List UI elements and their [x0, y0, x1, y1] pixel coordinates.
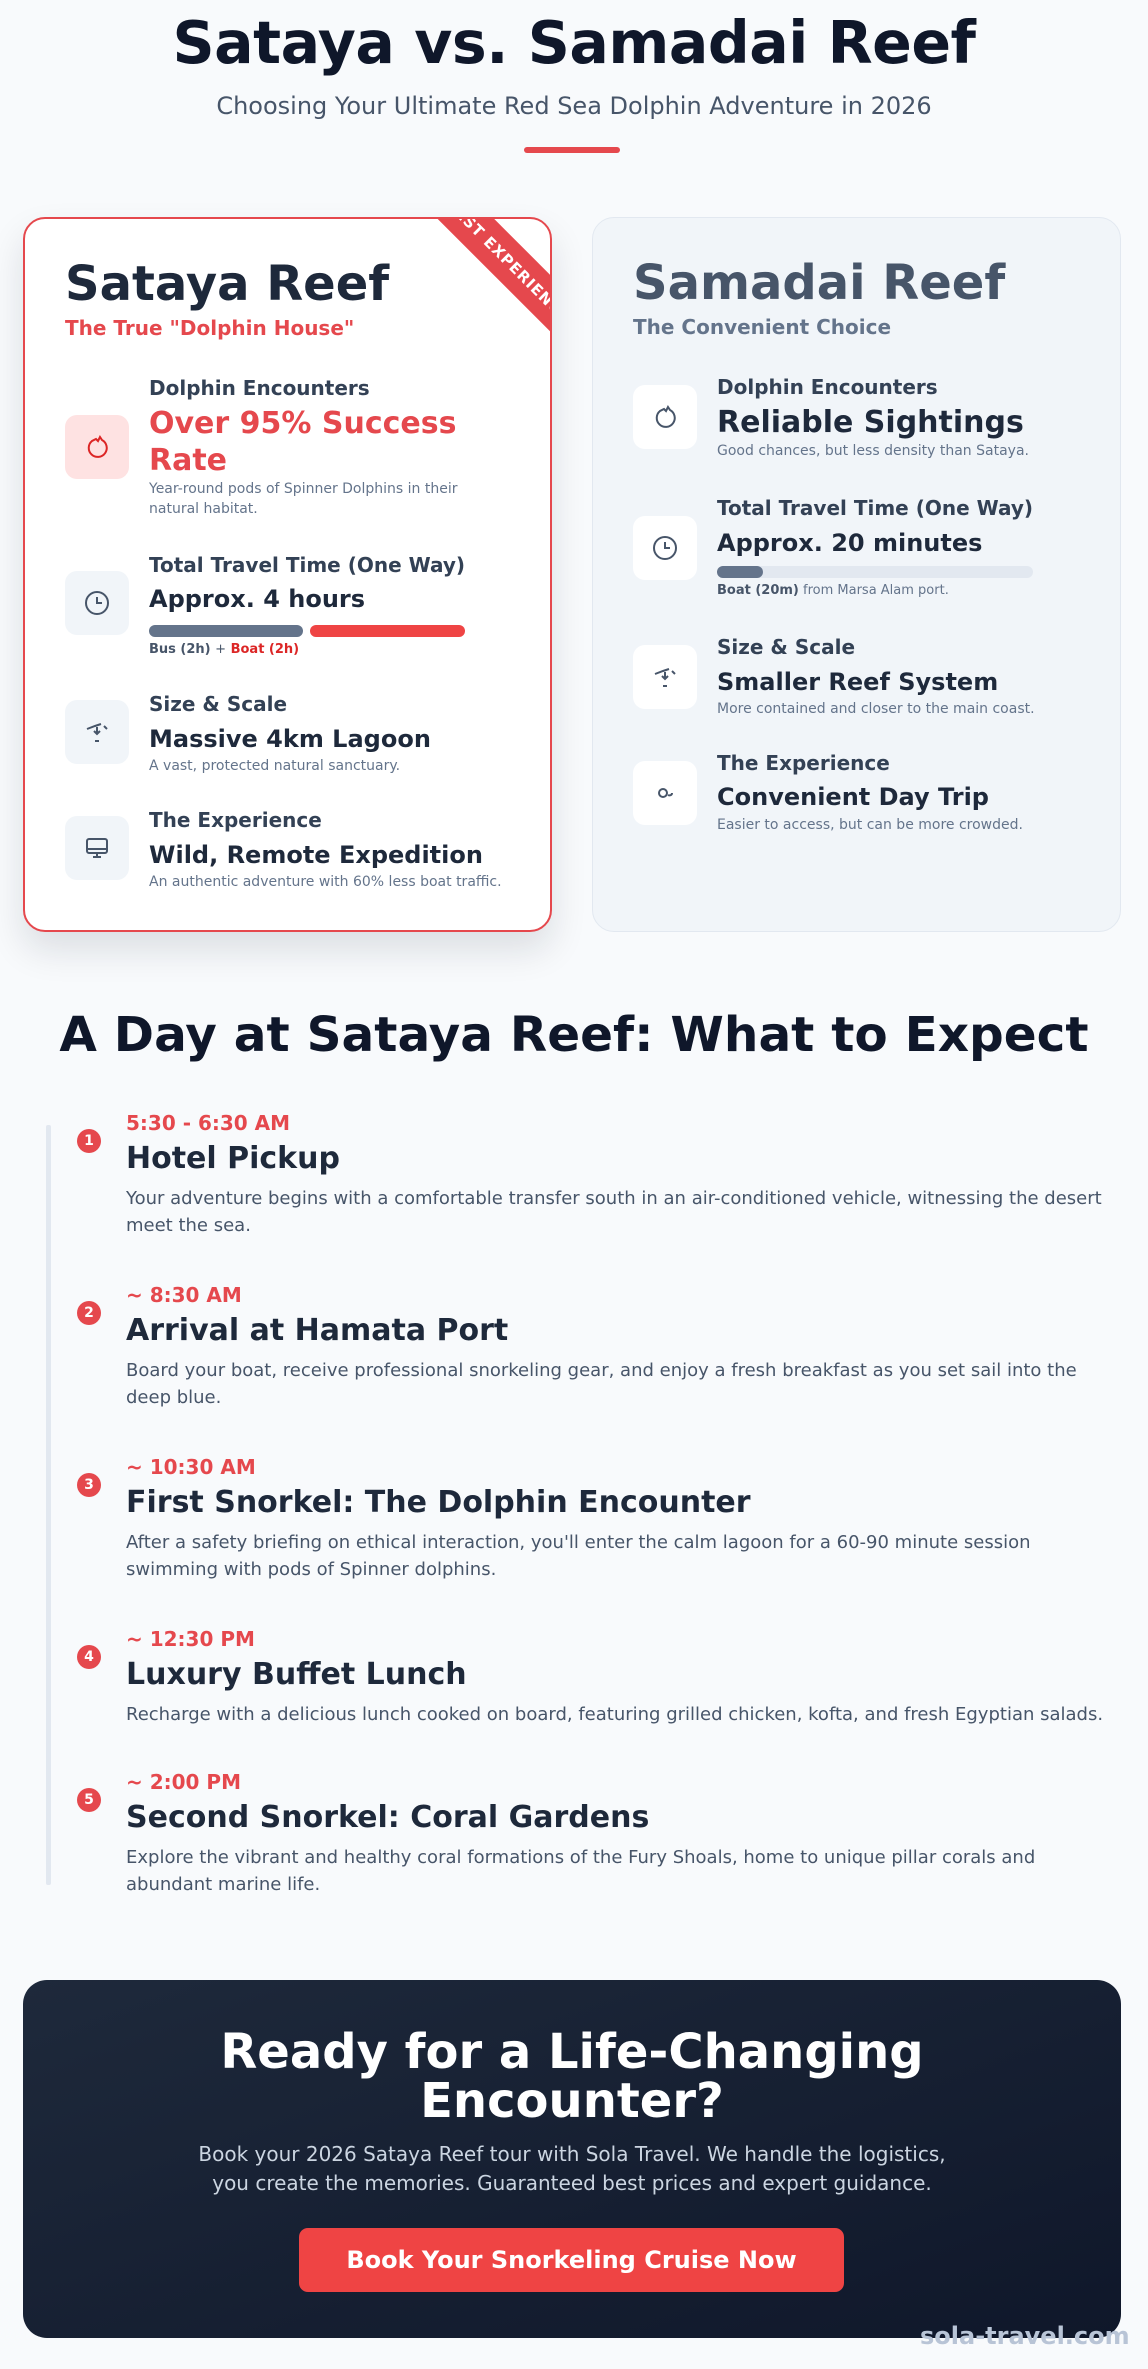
- text: size: Size & Scale: [717, 635, 855, 659]
- icon: clock: [633, 516, 697, 580]
- step 5: Explore the vibrant and healthy coral formations of the Fury Shoals, home to unique pillar corals and abundant marine life.: [126, 1847, 1035, 1895]
- step 2: 2: [84, 1305, 94, 1321]
- timeline: [46, 1125, 51, 1885]
- step 1: 1: [84, 1133, 94, 1149]
- CTA panel: [23, 1980, 1121, 2338]
- CTA text: you create the memories. Guaranteed best prices and expert guidance.: [212, 2171, 932, 2195]
- panel: Sataya Reef: An authentic adventure with 60% less boat traffic.: [149, 874, 502, 890]
- panel: Samadai Reef: More contained and closer to the main coast.: [717, 701, 1035, 717]
- section heading: A Day at Sataya Reef: What to Expect: [59, 1007, 1089, 1063]
- subheading: The True "Dolphin House": [65, 316, 354, 340]
- panel: Sataya Reef: Approx. 4 hours: [149, 585, 365, 613]
- step 5: [77, 1770, 1035, 1895]
- step 4: Recharge with a delicious lunch cooked on board, featuring grilled chicken, kofta, and fresh Egyptian salads.: [126, 1704, 1103, 1725]
- panel: Sataya Reef: A vast, protected natural sanctuary.: [149, 758, 400, 774]
- icon: clock: [65, 571, 129, 635]
- CTA button: Book Your Snorkeling Cruise Now: [346, 2246, 797, 2274]
- step 2: Arrival at Hamata Port: [126, 1313, 508, 1348]
- step 5: 5: [84, 1792, 94, 1808]
- panel: Sataya Reef: Over 95% Success Rate: [149, 406, 456, 478]
- step 4: [77, 1627, 1103, 1725]
- watermark: sola-travel.com: [920, 2322, 1130, 2350]
- panel: Samadai Reef: Boat (20m) from Marsa Alam port.: [717, 583, 949, 598]
- step 1: Hotel Pickup: [126, 1141, 340, 1176]
- timeline line: [46, 1125, 51, 1885]
- panel: Samadai Reef: Convenient Day Trip: [717, 783, 989, 811]
- heading: Sataya Reef: [65, 256, 389, 312]
- CTA text: Book your 2026 Sataya Reef tour with Sola Travel. We handle the logistics,: [198, 2142, 946, 2166]
- step 5: ~ 2:00 PM: [126, 1770, 241, 1794]
- text: experience: The Experience: [717, 751, 890, 775]
- accent bar: [524, 147, 620, 153]
- bar: bus + boat: [149, 625, 303, 637]
- title: Sataya vs. Samadai Reef: [173, 9, 975, 77]
- step 3: After a safety briefing on ethical interaction, you'll enter the calm lagoon for a 60-90 minute session swimming with pods of Spinner dolphins.: [126, 1532, 1030, 1580]
- CTA heading: Encounter?: [420, 2073, 724, 2129]
- panel: Sataya Reef: Massive 4km Lagoon: [149, 725, 431, 753]
- heading: Samadai Reef: [633, 255, 1005, 311]
- panel: Sataya Reef: [23, 217, 552, 932]
- panel: Sataya Reef: Year-round pods of Spinner Dolphins in their natural habitat.: [149, 481, 458, 517]
- CTA heading: [220, 2024, 924, 2129]
- text: dolphin encounters: Dolphin Encounters: [149, 376, 370, 400]
- text: size: Size & Scale: [149, 692, 287, 716]
- step 4: 4: [84, 1649, 94, 1665]
- panel: Samadai Reef: Reliable Sightings: [717, 405, 1024, 440]
- icon: dolphin: [65, 415, 129, 479]
- step 2: Board your boat, receive professional snorkeling gear, and enjoy a fresh breakfast as you set sail into the deep blue.: [126, 1360, 1077, 1408]
- panel: Samadai Reef: Easier to access, but can be more crowded.: [717, 817, 1023, 833]
- step 2: [77, 1283, 1077, 1408]
- icon: scale: [65, 700, 129, 764]
- icon: day trip: [633, 761, 697, 825]
- CTA heading: Ready for a Life-Changing: [220, 2024, 924, 2080]
- icon: expedition: [65, 816, 129, 880]
- step 4: ~ 12:30 PM: [126, 1627, 255, 1651]
- step 2: ~ 8:30 AM: [126, 1283, 242, 1307]
- CTA button: [299, 2228, 844, 2292]
- step 4: Luxury Buffet Lunch: [126, 1657, 467, 1692]
- step 3: First Snorkel: The Dolphin Encounter: [126, 1485, 751, 1520]
- panel: Samadai Reef: Good chances, but less density than Sataya.: [717, 443, 1029, 459]
- icon: dolphin: [633, 385, 697, 449]
- text: travel time: Total Travel Time (One Way): [717, 496, 1033, 520]
- ribbon: best experience: [398, 151, 618, 371]
- step 3: [77, 1455, 1030, 1580]
- subtitle: Choosing Your Ultimate Red Sea Dolphin Adventure in 2026: [216, 92, 932, 120]
- text: travel time: Total Travel Time (One Way): [149, 553, 465, 577]
- step 3: 3: [84, 1477, 94, 1493]
- subheading: The Convenient Choice: [633, 315, 891, 339]
- step 3: ~ 10:30 AM: [126, 1455, 256, 1479]
- text: dolphin encounters: Dolphin Encounters: [717, 375, 938, 399]
- step 1: Your adventure begins with a comfortable transfer south in an air-conditioned vehicle, witnessing the desert meet the sea.: [126, 1188, 1102, 1236]
- step 1: [77, 1111, 1102, 1236]
- panel: Sataya Reef: Bus (2h) + Boat (2h): [149, 642, 299, 657]
- icon: scale: [633, 645, 697, 709]
- text: experience: The Experience: [149, 808, 322, 832]
- panel: Sataya Reef: Wild, Remote Expedition: [149, 841, 483, 869]
- panel: Samadai Reef: Approx. 20 minutes: [717, 529, 982, 557]
- step 5: Second Snorkel: Coral Gardens: [126, 1800, 649, 1835]
- step 1: 5:30 - 6:30 AM: [126, 1111, 290, 1135]
- panel: Samadai Reef: [592, 217, 1121, 932]
- bar: boat 20m: [717, 566, 1033, 578]
- CTA text: [198, 2142, 946, 2195]
- panel: Samadai Reef: Smaller Reef System: [717, 668, 998, 696]
